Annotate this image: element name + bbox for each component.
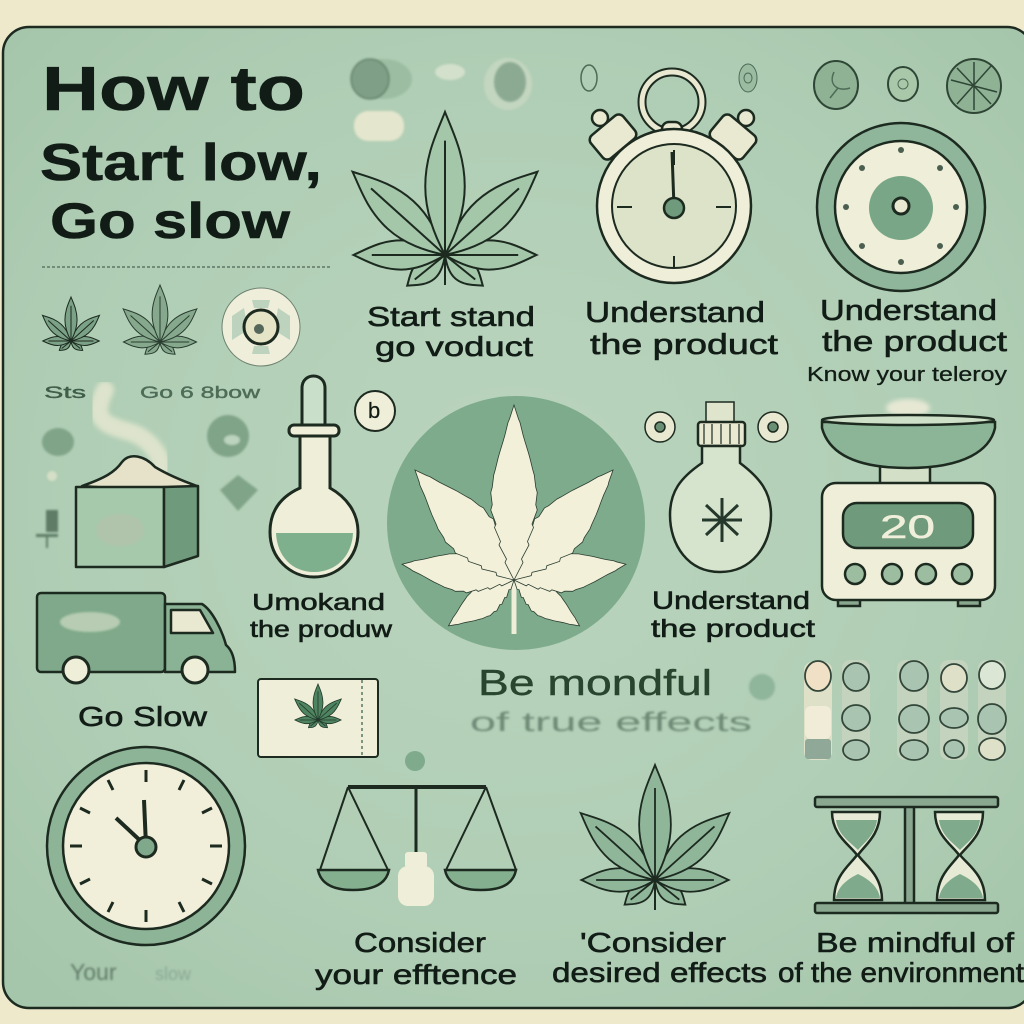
scale display value: 20 — [880, 509, 935, 545]
icon: dial gauge — [817, 123, 985, 291]
icon: round badge — [222, 288, 300, 366]
caption: consider desired effects — [552, 927, 767, 988]
heading: be mindful: of true effects — [470, 707, 752, 737]
title: Go slow — [50, 193, 290, 249]
icon: balance scale — [318, 751, 516, 906]
icon: small letter badge: b — [368, 398, 380, 423]
icon: bottom leaf — [570, 765, 740, 912]
icons: faded top row — [351, 58, 1001, 141]
caption: be mindful of the environment: of the environment — [778, 957, 1024, 988]
icon: wall clock — [47, 747, 245, 945]
icon: powder box — [76, 456, 198, 567]
icon: kitchen scale — [822, 399, 995, 606]
caption: be mindful of the environment: Be mindful of — [816, 927, 1014, 958]
caption: understand the product 2: Know your teleroy — [807, 364, 1007, 386]
icon: stopwatch — [587, 72, 759, 283]
icon: small leaf left — [39, 297, 103, 353]
caption: start stand: Start stand — [367, 301, 535, 332]
caption: consider desired effects: desired effects — [552, 957, 767, 988]
caption: your slow (faded): slow — [155, 964, 192, 984]
caption: go slow: Go Slow — [78, 701, 208, 732]
faded label row: Sts — [44, 383, 86, 402]
icon: dropper flask — [270, 376, 358, 577]
title — [40, 55, 322, 249]
caption: consider your effence — [315, 927, 517, 990]
caption: smokand the produw: Umokand — [252, 589, 385, 615]
caption: understand the product 2: the product — [822, 326, 1007, 358]
caption: understand the product 1: Understand — [585, 297, 765, 329]
caption: be mindful of the environment — [778, 927, 1024, 988]
icon: tincture bottle — [670, 402, 771, 572]
caption: start stand: go voduct — [375, 331, 533, 362]
icon: packet with leaf — [258, 679, 378, 757]
caption: understand the product 3 — [651, 587, 815, 643]
caption: understand the product 2: Understand — [820, 295, 997, 327]
caption: consider desired effects: 'Consider — [580, 927, 726, 958]
icon: small letter badge — [355, 391, 395, 431]
caption: understand the product 3: Understand — [652, 587, 810, 615]
icon: delivery truck — [37, 593, 235, 683]
caption: understand the product 2 — [807, 295, 1007, 386]
divider under title — [42, 266, 330, 268]
title: Start low, — [40, 134, 322, 192]
icon: top cannabis leaf — [340, 112, 550, 295]
caption: understand the product 1: the product — [590, 329, 778, 361]
caption: understand the product 3: the product — [651, 615, 815, 643]
caption: smokand the produw — [250, 589, 392, 642]
icon: twin hourglasses — [815, 797, 998, 913]
icon: steam smoke — [99, 390, 161, 470]
caption: consider your effence: your efftence — [315, 959, 517, 990]
heading: be mindful — [470, 662, 752, 737]
caption: your slow (faded): Your — [70, 959, 117, 985]
caption: consider your effence: Consider — [354, 927, 486, 958]
heading: be mindful: Be mondful — [478, 662, 712, 703]
icon: faint green drop — [749, 674, 775, 700]
caption: start stand — [367, 301, 535, 362]
icons: faded side blobs — [36, 415, 258, 548]
title: How to — [42, 55, 305, 124]
icon: grid of small vials — [804, 634, 1006, 760]
center circle with leaf — [387, 396, 645, 650]
caption: your slow (faded) — [70, 959, 192, 985]
faded label row: Go 6 8bow — [140, 383, 261, 402]
icon: small dots beside bottle — [645, 412, 788, 442]
faded label row — [44, 383, 261, 402]
caption: understand the product 1 — [585, 297, 778, 361]
caption: smokand the produw: the produw — [250, 616, 392, 642]
icon: small leaf right — [118, 285, 202, 358]
